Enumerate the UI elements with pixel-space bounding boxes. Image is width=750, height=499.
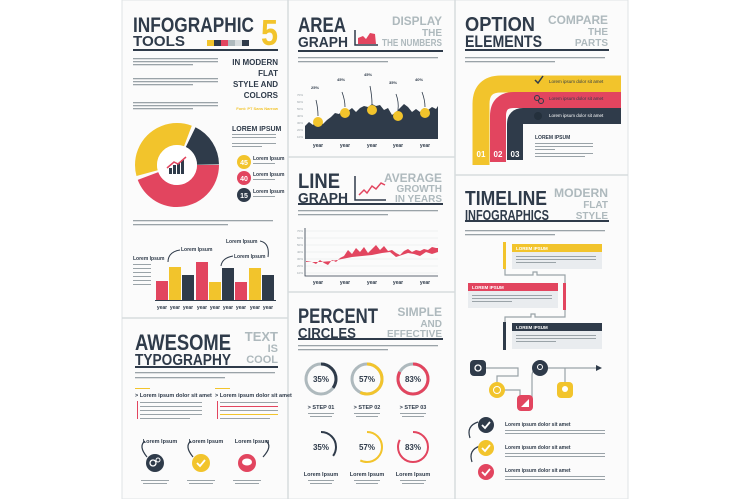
title bbox=[298, 170, 442, 207]
area chart: year bbox=[313, 143, 323, 149]
area chart: 70% bbox=[297, 93, 303, 97]
bar chart: year bbox=[210, 305, 220, 311]
panel: timeline infographics bbox=[465, 186, 609, 480]
circles row 1: > STEP 03 bbox=[400, 405, 426, 411]
line chart: year bbox=[420, 280, 430, 286]
checklist bbox=[469, 417, 605, 480]
text block bbox=[133, 220, 273, 225]
bar chart: year bbox=[236, 305, 246, 311]
legend bbox=[232, 126, 285, 202]
checklist: Lorem ipsum dolor sit amet bbox=[505, 445, 571, 451]
line chart: year bbox=[340, 280, 350, 286]
circles row 1: > STEP 02 bbox=[354, 405, 380, 411]
area chart: 10% bbox=[297, 135, 303, 139]
option bands: Lorem ipsum dolor sit amet bbox=[549, 96, 604, 101]
title: GRAPH bbox=[298, 190, 348, 207]
option bands: LOREM IPSUM bbox=[535, 135, 570, 141]
title bbox=[133, 12, 278, 53]
title: AWESOME bbox=[135, 330, 231, 355]
timeline bbox=[468, 242, 602, 350]
option bands: Lorem ipsum dolor sit amet bbox=[549, 113, 604, 118]
circles row 1: > STEP 01 bbox=[308, 405, 334, 411]
circles row 2: Lorem Ipsum bbox=[350, 472, 384, 478]
title: 5 bbox=[261, 12, 278, 53]
circles row 2: 83% bbox=[405, 443, 421, 452]
panel: infographic tools bbox=[133, 12, 285, 311]
color swatches bbox=[207, 40, 249, 46]
text block bbox=[298, 210, 438, 215]
area chart: 40% bbox=[297, 114, 303, 118]
panel: percent circles bbox=[298, 305, 443, 484]
text block bbox=[135, 372, 275, 378]
circles row 1: 57% bbox=[359, 375, 375, 384]
area chart: 20% bbox=[297, 128, 303, 132]
area chart: 35% bbox=[389, 80, 397, 85]
icons row bbox=[141, 439, 269, 484]
title: MODERN bbox=[554, 186, 608, 200]
icon: area bbox=[355, 30, 378, 45]
circles row 2: Lorem Ipsum bbox=[304, 472, 338, 478]
legend: Lorem Ipsum bbox=[253, 189, 285, 195]
option bands: 03 bbox=[511, 150, 520, 159]
subtitle: COLORS bbox=[244, 91, 279, 100]
text block bbox=[133, 58, 218, 109]
subtitle: Font: PT Sans Narrow bbox=[236, 106, 279, 111]
area chart: year bbox=[340, 143, 350, 149]
title: OPTION bbox=[465, 14, 535, 36]
icons row: Lorem Ipsum bbox=[143, 439, 177, 445]
line chart: 50% bbox=[297, 243, 303, 247]
circles row 1: 35% bbox=[313, 375, 329, 384]
title bbox=[298, 14, 442, 51]
title bbox=[465, 13, 608, 51]
line chart: year bbox=[367, 280, 377, 286]
text block bbox=[298, 57, 438, 62]
icon flow bbox=[470, 360, 602, 411]
title: AVERAGE bbox=[384, 171, 442, 185]
bar chart bbox=[133, 239, 276, 311]
panel: option elements bbox=[465, 13, 621, 165]
circles row 2: 57% bbox=[359, 443, 375, 452]
area chart: 40% bbox=[415, 77, 423, 82]
timeline: LOREM IPSUM bbox=[516, 325, 548, 330]
text block bbox=[465, 57, 605, 62]
title: PERCENT bbox=[298, 305, 378, 328]
timeline: LOREM IPSUM bbox=[516, 246, 548, 251]
title: GROWTH bbox=[396, 184, 442, 195]
title: COOL bbox=[246, 354, 278, 366]
donut chart bbox=[146, 134, 208, 196]
title: COMPARE bbox=[548, 13, 608, 27]
title: LINE bbox=[298, 170, 340, 193]
circles row 2 bbox=[304, 432, 430, 484]
line chart bbox=[297, 228, 438, 286]
area chart: 60% bbox=[297, 100, 303, 104]
title: CIRCLES bbox=[298, 325, 356, 342]
line chart: 70% bbox=[297, 229, 303, 233]
title: PARTS bbox=[575, 38, 608, 49]
area chart: year bbox=[420, 143, 430, 149]
area chart: 25% bbox=[311, 85, 319, 90]
area chart: year bbox=[393, 143, 403, 149]
bar chart: Lorem Ipsum bbox=[226, 239, 258, 245]
area chart: year bbox=[367, 143, 377, 149]
checklist: Lorem ipsum dolor sit amet bbox=[505, 422, 571, 428]
checklist: Lorem ipsum dolor sit amet bbox=[505, 468, 571, 474]
circles row 1: 83% bbox=[405, 375, 421, 384]
icons row: Lorem Ipsum bbox=[235, 439, 269, 445]
bar chart: Lorem Ipsum bbox=[181, 247, 213, 253]
panel: area graph bbox=[297, 14, 443, 149]
legend: 40 bbox=[240, 176, 248, 183]
line chart: 60% bbox=[297, 236, 303, 240]
title: IS bbox=[268, 343, 278, 355]
text block bbox=[465, 230, 605, 235]
text columns bbox=[135, 388, 292, 419]
bar chart: year bbox=[157, 305, 167, 311]
title: FLAT bbox=[583, 200, 608, 211]
text block bbox=[298, 345, 438, 350]
title: AND bbox=[420, 319, 442, 330]
line chart: 20% bbox=[297, 264, 303, 268]
title bbox=[465, 186, 608, 224]
title: THE bbox=[588, 27, 608, 38]
option bands: Lorem ipsum dolor sit amet bbox=[549, 79, 604, 84]
line chart: 10% bbox=[297, 271, 303, 275]
panel: line graph bbox=[297, 170, 443, 286]
title: EFFECTIVE bbox=[387, 329, 442, 340]
icons row: Lorem Ipsum bbox=[189, 439, 223, 445]
icon: line bbox=[355, 176, 386, 200]
circles row 2: Lorem Ipsum bbox=[396, 472, 430, 478]
title: STYLE bbox=[576, 211, 608, 222]
area chart: 45% bbox=[364, 72, 372, 77]
area chart: 30% bbox=[297, 121, 303, 125]
option bands: 01 bbox=[477, 150, 486, 159]
option bands: 02 bbox=[494, 150, 503, 159]
legend: Lorem Ipsum bbox=[253, 172, 285, 178]
area chart: 45% bbox=[337, 77, 345, 82]
title: TEXT bbox=[245, 329, 278, 344]
subtitle: FLAT bbox=[258, 69, 278, 78]
title: DISPLAY bbox=[392, 14, 442, 28]
circles row 2: 35% bbox=[313, 443, 329, 452]
subtitle: STYLE AND bbox=[233, 80, 278, 89]
title: GRAPH bbox=[298, 34, 348, 51]
title bbox=[298, 305, 442, 342]
panel: awesome typography bbox=[135, 329, 292, 484]
title: THE bbox=[422, 28, 442, 39]
line chart: year bbox=[313, 280, 323, 286]
circles row 1 bbox=[306, 364, 428, 417]
line chart: 40% bbox=[297, 250, 303, 254]
title: ELEMENTS bbox=[465, 32, 542, 51]
bar chart: year bbox=[223, 305, 233, 311]
bar chart: year bbox=[197, 305, 207, 311]
area chart bbox=[297, 72, 438, 149]
title bbox=[135, 329, 278, 369]
bar chart: year bbox=[183, 305, 193, 311]
title: TOOLS bbox=[133, 33, 185, 50]
title: IN YEARS bbox=[395, 194, 442, 205]
title: INFOGRAPHIC bbox=[133, 14, 254, 37]
subtitle: IN MODERN bbox=[232, 58, 278, 67]
title: AREA bbox=[298, 14, 346, 37]
subtitle bbox=[232, 58, 279, 111]
area chart: 50% bbox=[297, 107, 303, 111]
timeline: LOREM IPSUM bbox=[472, 285, 504, 290]
title: TIMELINE bbox=[465, 188, 547, 210]
bar chart: Lorem Ipsum bbox=[133, 256, 165, 262]
text columns: > Lorem ipsum dolor sit amet bbox=[135, 393, 212, 399]
bar chart: Lorem Ipsum bbox=[234, 254, 266, 260]
option bands bbox=[477, 76, 621, 165]
title: SIMPLE bbox=[397, 305, 442, 319]
line chart: year bbox=[393, 280, 403, 286]
legend: 45 bbox=[240, 160, 248, 167]
legend: 15 bbox=[240, 193, 248, 200]
title: THE NUMBERS bbox=[382, 38, 442, 49]
bar chart: year bbox=[170, 305, 180, 311]
bar chart: year bbox=[263, 305, 273, 311]
legend: LOREM IPSUM bbox=[232, 126, 282, 133]
line chart: 30% bbox=[297, 257, 303, 261]
text columns: > Lorem ipsum dolor sit amet bbox=[215, 393, 292, 399]
title: TYPOGRAPHY bbox=[135, 352, 231, 369]
title: INFOGRAPHICS bbox=[465, 207, 549, 224]
bar chart: year bbox=[250, 305, 260, 311]
legend: Lorem Ipsum bbox=[253, 156, 285, 162]
